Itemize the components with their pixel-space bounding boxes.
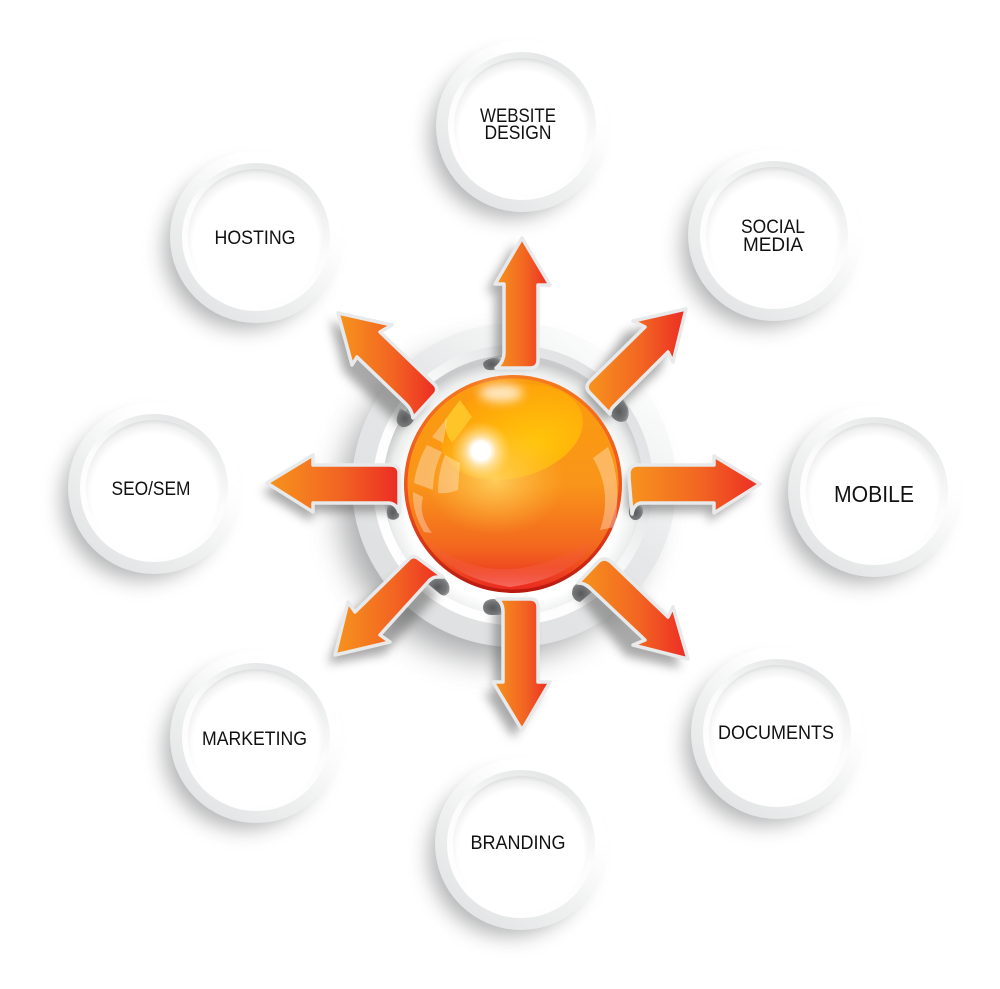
sphere: yellow glow — [431, 370, 593, 494]
arrow: left — [267, 455, 399, 512]
label: marketing: MARKETING — [202, 729, 307, 750]
label: branding: BRANDING — [470, 833, 566, 854]
label: social media: MEDIA — [743, 235, 803, 256]
arrow: upper left — [338, 313, 437, 418]
sphere: top highlight — [479, 384, 523, 402]
circle: mobile — [782, 405, 960, 583]
arrow: lower left — [335, 557, 443, 655]
arrow: upper right — [587, 309, 686, 414]
label: mobile: MOBILE — [834, 481, 914, 507]
label: seo/sem: SEO/SEM — [112, 479, 190, 500]
circle: branding — [429, 758, 607, 936]
label: website design: WEBSITE — [480, 106, 556, 127]
circle: website design — [430, 40, 608, 218]
arrow: lower right — [578, 559, 688, 659]
sphere: window reflections — [413, 418, 617, 533]
label: hosting: HOSTING — [214, 228, 296, 249]
circle: seo/sem — [62, 402, 240, 580]
central orange sphere — [404, 370, 622, 593]
sphere: upper pane — [445, 400, 472, 443]
circle: marketing — [164, 651, 342, 829]
label: website design: DESIGN — [484, 123, 552, 144]
label: social media: SOCIAL — [741, 217, 805, 238]
circle: documents — [685, 647, 863, 825]
central ring — [340, 323, 676, 660]
ribbon fold shadows — [387, 357, 643, 615]
sphere: main highlight — [451, 421, 511, 481]
sphere: bottom crescent — [427, 537, 597, 587]
arrow: right — [629, 456, 760, 514]
sphere: soft lower glow — [425, 425, 565, 535]
circle: social media — [682, 149, 860, 327]
circle: hosting — [164, 151, 342, 329]
arrow: down — [493, 599, 550, 730]
arrow shadows — [262, 244, 752, 738]
arrow: up — [495, 238, 550, 368]
label: documents: DOCUMENTS — [718, 723, 834, 744]
